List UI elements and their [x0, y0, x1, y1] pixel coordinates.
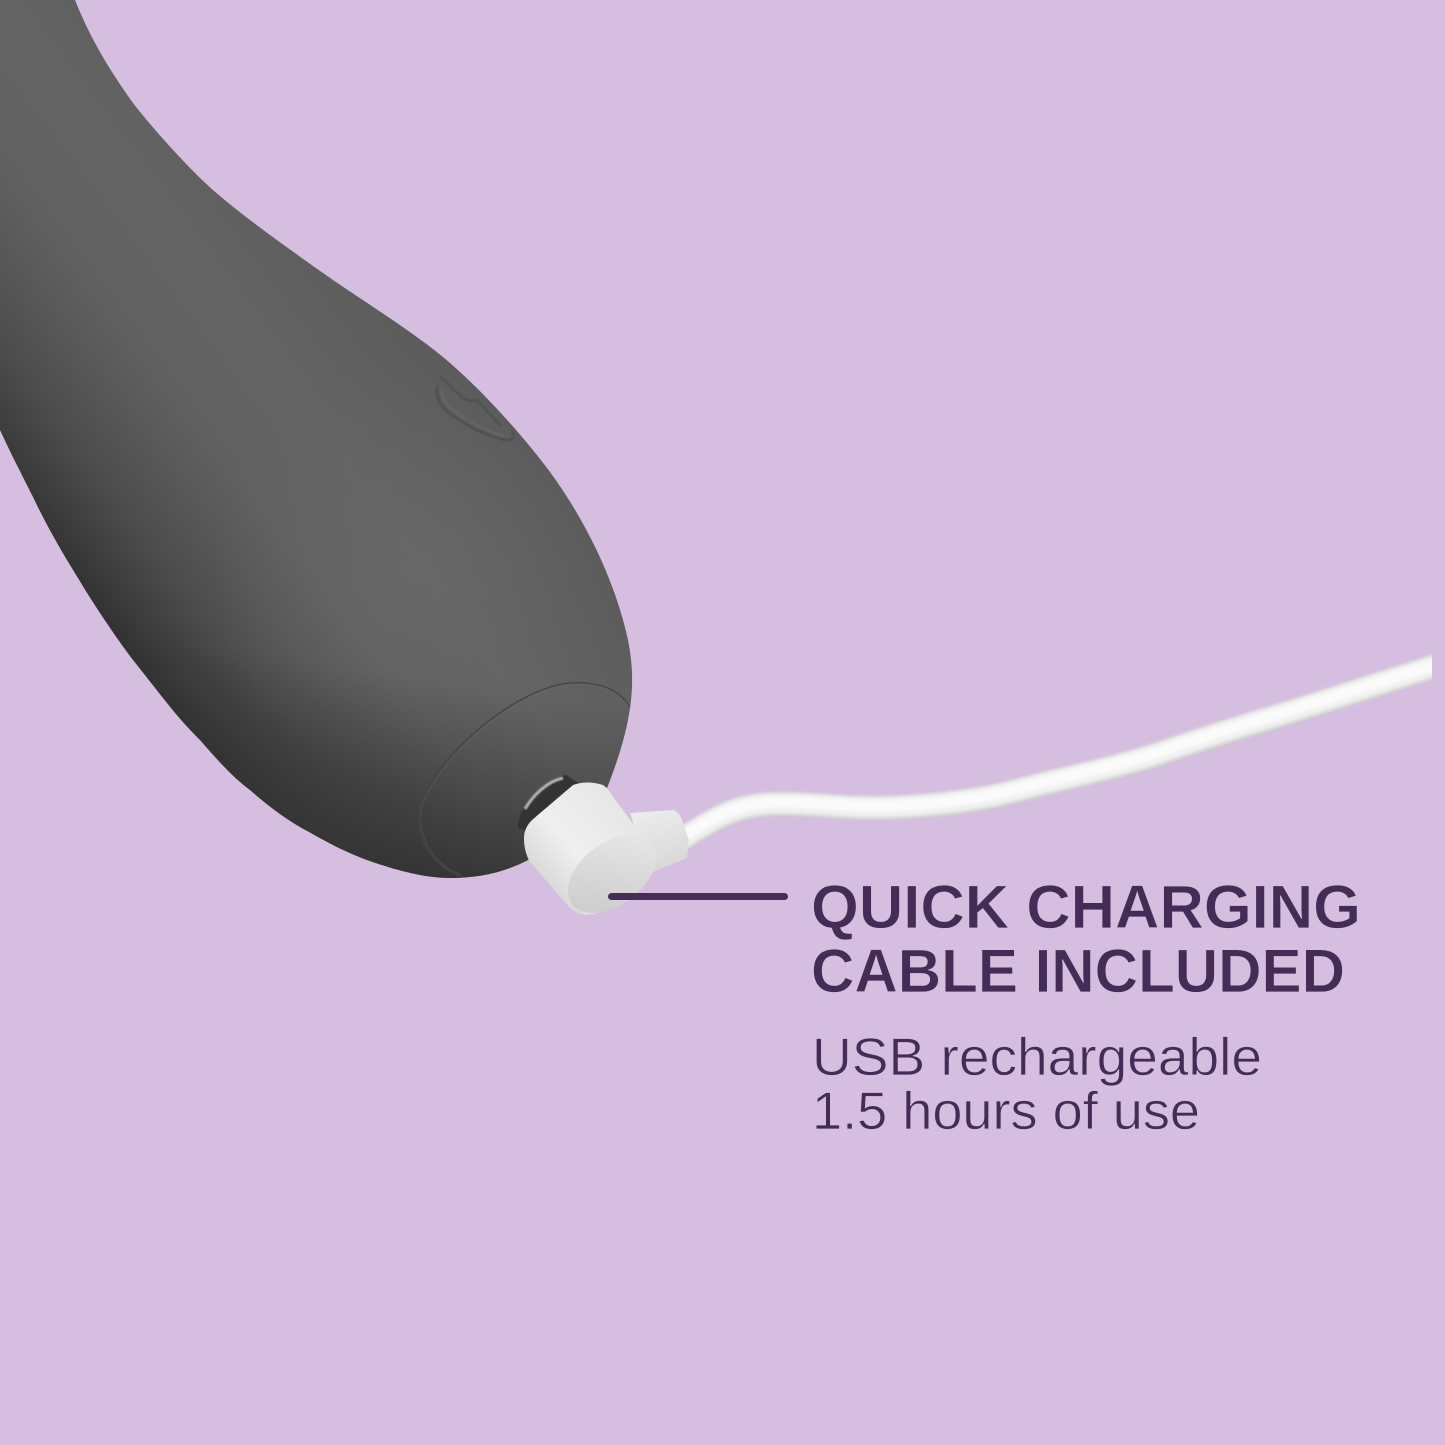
base cap outline	[419, 683, 633, 876]
strain relief	[630, 810, 689, 873]
metal ring	[518, 775, 580, 832]
heading	[811, 873, 1361, 1005]
description text: 1.5 hours of use	[812, 1082, 1200, 1141]
description text	[812, 1028, 1262, 1141]
device body	[0, 0, 660, 900]
description text: USB rechargeable	[812, 1028, 1262, 1087]
heading: CABLE INCLUDED	[811, 937, 1345, 1005]
heading: QUICK CHARGING	[811, 873, 1361, 941]
callout leader line	[608, 893, 788, 900]
magnetic plug	[524, 782, 671, 929]
icon: power button	[437, 376, 514, 440]
charging cable	[678, 663, 1440, 842]
